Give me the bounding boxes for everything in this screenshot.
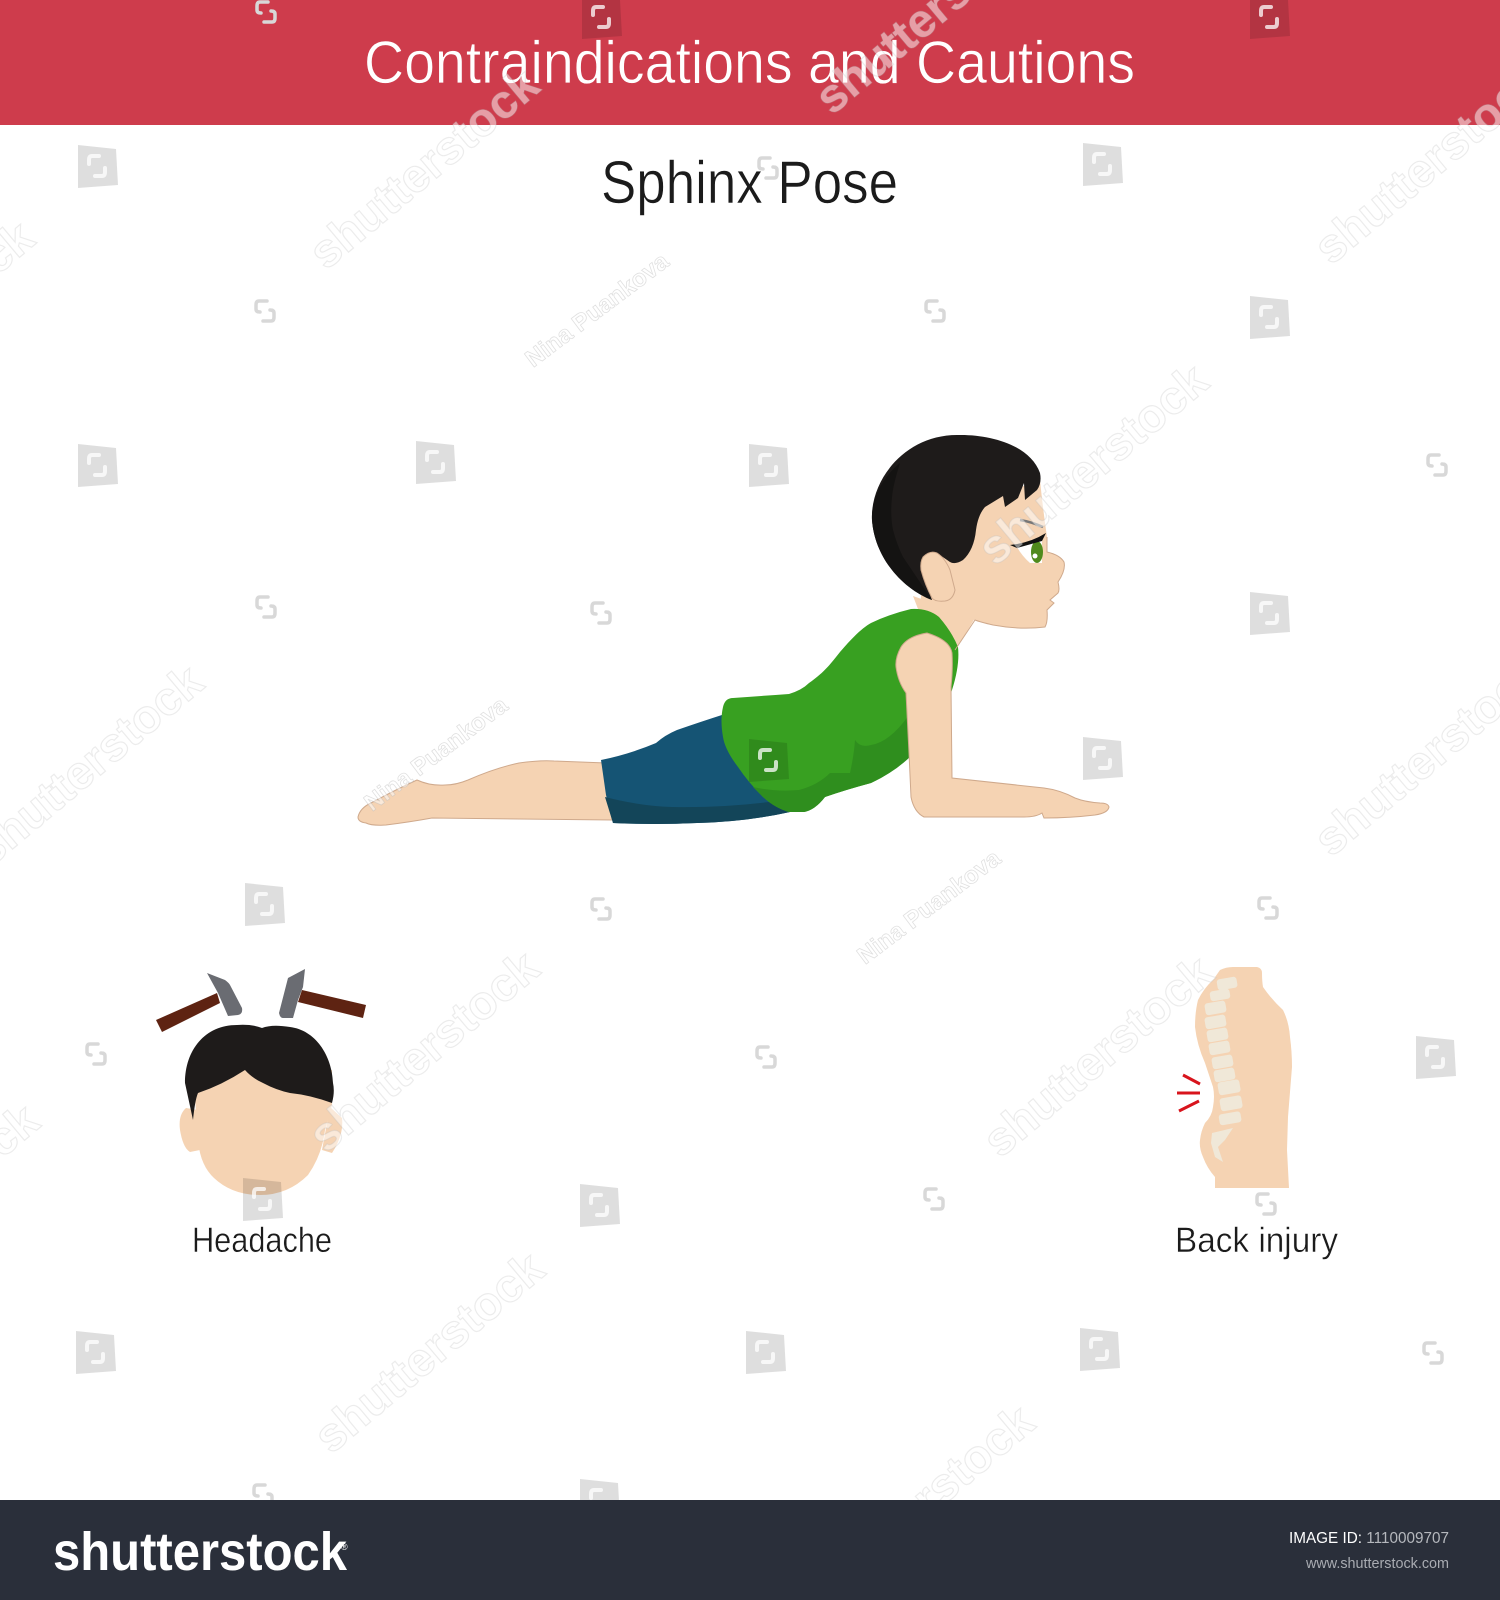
- watermark text: shutterstock: [972, 944, 1223, 1167]
- watermark text: shutterstock: [303, 1240, 554, 1463]
- left ear: [180, 1108, 200, 1152]
- watermark text: shutterstock: [967, 352, 1218, 575]
- icon: headache: [156, 969, 366, 1195]
- watermark text: shutterstock: [298, 56, 549, 279]
- face: [920, 480, 1064, 628]
- face profile line: [955, 537, 1064, 650]
- figure: sphinx pose: [358, 435, 1109, 825]
- watermark author: Nina Puankova: [852, 844, 1007, 970]
- footer logo: shutterstock: [53, 1522, 348, 1582]
- shirt: [722, 609, 958, 812]
- shirt shadow: [753, 715, 912, 812]
- watermark author: Nina Puankova: [520, 247, 675, 373]
- ear: [921, 552, 955, 601]
- torso: [1195, 967, 1292, 1188]
- footer bar: [0, 1500, 1500, 1600]
- subtitle: pose name: Sphinx Pose: [601, 149, 898, 216]
- watermark text: shutterstock: [298, 939, 549, 1162]
- icon: back injury: [1177, 967, 1292, 1188]
- spine: [1204, 976, 1243, 1162]
- hair shadow: [872, 463, 932, 600]
- footer registered mark: ®: [341, 1542, 348, 1552]
- label: back injury: Back injury: [1175, 1221, 1338, 1260]
- pain marks: [1177, 1075, 1200, 1111]
- title: Contraindications and Cautions: [364, 29, 1135, 96]
- eye: [1010, 520, 1046, 563]
- footer url: www.shutterstock.com: [1305, 1555, 1449, 1572]
- hair: [872, 435, 1041, 600]
- right ear: [322, 1107, 342, 1153]
- watermark author: [359, 247, 1007, 970]
- watermark author: Nina Puankova: [359, 691, 514, 817]
- hair: [185, 1025, 334, 1120]
- face: [193, 1070, 332, 1195]
- label: headache: Headache: [192, 1221, 332, 1260]
- footer image id: IMAGE ID: 1110009707: [1289, 1530, 1449, 1547]
- leg: [358, 761, 612, 825]
- left hammer: [156, 973, 242, 1032]
- head: [872, 435, 1064, 650]
- shorts: [601, 714, 790, 824]
- right hammer: [279, 969, 366, 1018]
- header bar: [0, 0, 1500, 125]
- arm: [896, 633, 1109, 818]
- neck: [913, 596, 975, 650]
- shorts shadow: [605, 797, 790, 824]
